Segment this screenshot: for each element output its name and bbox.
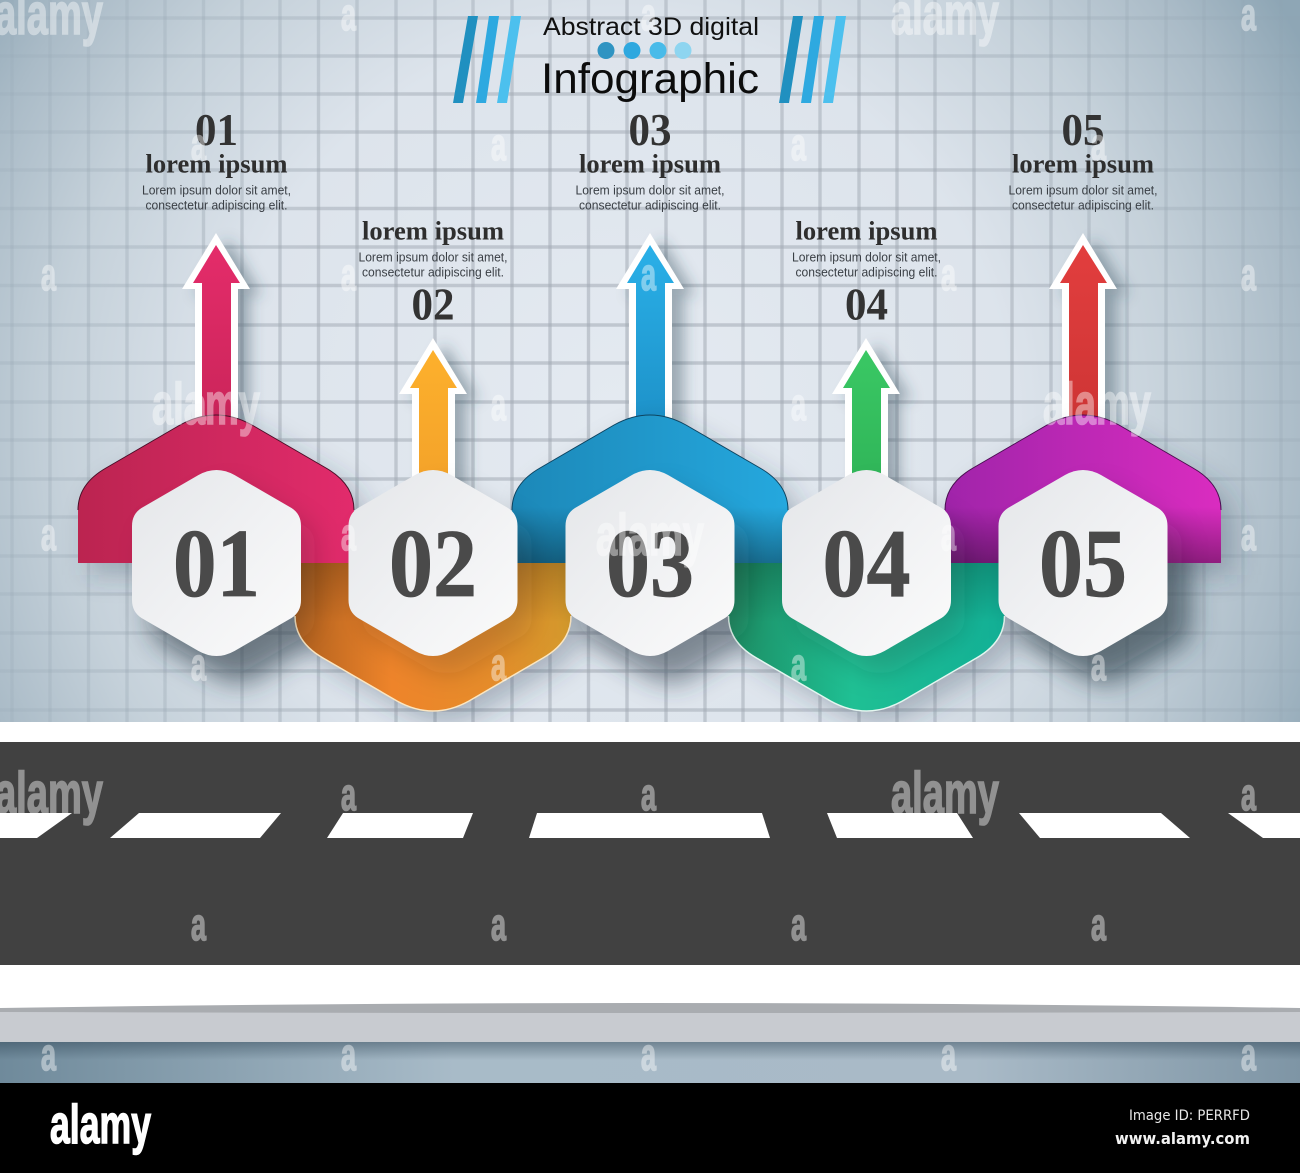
- stock watermarks: a: [1091, 119, 1107, 170]
- stock watermarks: a: [491, 899, 507, 950]
- hexagon badge 04: [782, 470, 951, 656]
- hexagon badge 01: [132, 470, 301, 656]
- stock watermarks: alamy: [596, 503, 704, 568]
- text block 02: lorem ipsum: [362, 216, 504, 246]
- stock watermarks: a: [491, 639, 507, 690]
- stock watermarks: a: [191, 119, 207, 170]
- stock watermarks: a: [41, 509, 57, 560]
- footer url: www.alamy.com: [1115, 1129, 1250, 1148]
- arrow 01 crimson: [182, 233, 262, 446]
- arch band 03 blue: [512, 415, 788, 563]
- hexagon badge 03: 03: [606, 510, 694, 618]
- title block: [453, 13, 846, 103]
- stock watermarks: alamy: [152, 372, 260, 437]
- arrow 03 blue: [616, 233, 696, 446]
- stock watermarks: a: [191, 899, 207, 950]
- text block 05: Lorem ipsum dolor sit amet,: [1008, 184, 1158, 198]
- strip under road: [0, 1042, 1300, 1083]
- stock watermarks: a: [1241, 509, 1257, 560]
- text block 03: Lorem ipsum dolor sit amet,: [576, 184, 724, 198]
- stock watermarks: a: [341, 1029, 357, 1080]
- stock watermarks: a: [41, 1029, 57, 1080]
- title dots: [598, 42, 692, 59]
- road kerb: [0, 965, 1300, 1043]
- arch band 01 crimson: [78, 415, 354, 563]
- text block 05: 05: [1062, 104, 1104, 155]
- road: [0, 722, 1300, 1043]
- stock watermarks: a: [1091, 899, 1107, 950]
- text block 02: consectetur adipiscing elit.: [362, 266, 504, 280]
- footer bar: [0, 1083, 1300, 1173]
- text block 03: lorem ipsum: [579, 150, 721, 178]
- text block 05: consectetur adipiscing elit.: [1012, 198, 1154, 212]
- text block 04: lorem ipsum: [796, 216, 938, 246]
- stock watermarks: a: [1241, 1029, 1257, 1080]
- text block 02: [358, 216, 508, 330]
- stock watermarks: a: [341, 769, 357, 820]
- text block 04: [792, 216, 941, 330]
- stock watermarks: a: [941, 1029, 957, 1080]
- wall shadows of bands and hexagons: [90, 427, 1233, 723]
- text block 01: Lorem ipsum dolor sit amet,: [142, 184, 291, 198]
- stock watermarks: a: [491, 379, 507, 430]
- arrow 04 green: [832, 338, 912, 496]
- stock watermarks: a: [341, 509, 357, 560]
- text block 02: 02: [412, 278, 454, 330]
- stock watermarks: a: [941, 249, 957, 300]
- text block 02: Lorem ipsum dolor sit amet,: [358, 250, 508, 264]
- text block 01: consectetur adipiscing elit.: [146, 198, 288, 212]
- stock watermarks: a: [191, 639, 207, 690]
- text block 04: consectetur adipiscing elit.: [796, 266, 938, 280]
- text block 05: [1008, 104, 1158, 212]
- hexagon badge 01: 01: [173, 510, 260, 618]
- lower band 02 orange: [295, 563, 571, 711]
- arch band 05 magenta: [945, 415, 1221, 563]
- text block 01: [142, 104, 291, 212]
- text block 03: 03: [628, 104, 672, 155]
- hexagon badge 05: [998, 470, 1168, 656]
- footer logo: alamy: [50, 1093, 151, 1155]
- arrow 02 orange: [399, 338, 479, 496]
- hexagon badge 05: 05: [1039, 510, 1127, 618]
- stock watermarks: a: [1091, 639, 1107, 690]
- lower band 04 teal: [728, 563, 1004, 711]
- title line 2: Infographic: [541, 55, 759, 103]
- stock watermarks: a: [791, 379, 807, 430]
- stock watermarks: alamy: [891, 761, 999, 826]
- stock watermarks: a: [641, 1029, 657, 1080]
- arrow 05 red: [1049, 233, 1129, 446]
- text block 01: 01: [195, 104, 238, 155]
- footer image id: Image ID: PERRFD: [1129, 1108, 1250, 1124]
- title stripes left: [453, 16, 521, 103]
- road lane dashes: [0, 813, 1300, 838]
- stock watermarks: a: [41, 249, 57, 300]
- stock watermarks: a: [641, 769, 657, 820]
- hexagon badge 04: 04: [822, 510, 910, 618]
- hexagon badge 02: [348, 470, 518, 656]
- text block 01: lorem ipsum: [146, 150, 288, 178]
- text block 05: lorem ipsum: [1012, 150, 1154, 178]
- text block 04: 04: [845, 278, 888, 330]
- hexagon badge 03: [566, 470, 734, 656]
- text block 03: [576, 104, 724, 212]
- stock watermarks: a: [791, 899, 807, 950]
- stock watermarks: alamy: [1043, 372, 1151, 437]
- text block 03: consectetur adipiscing elit.: [579, 198, 721, 212]
- stock watermarks: a: [941, 509, 957, 560]
- stock watermarks: a: [341, 249, 357, 300]
- stock watermarks: a: [1241, 249, 1257, 300]
- stock watermarks: a: [641, 249, 657, 300]
- hexagon shadows on bands: [146, 488, 1182, 674]
- stock watermarks: a: [491, 119, 507, 170]
- hexagon badge 02: 02: [389, 510, 477, 618]
- title stripes right: [779, 16, 846, 103]
- text block 04: Lorem ipsum dolor sit amet,: [792, 250, 941, 264]
- stock watermarks: a: [791, 639, 807, 690]
- stock watermarks: a: [791, 119, 807, 170]
- title line 1: Abstract 3D digital: [543, 13, 759, 41]
- stock watermarks: a: [1241, 769, 1257, 820]
- stock watermarks: a: [191, 379, 207, 430]
